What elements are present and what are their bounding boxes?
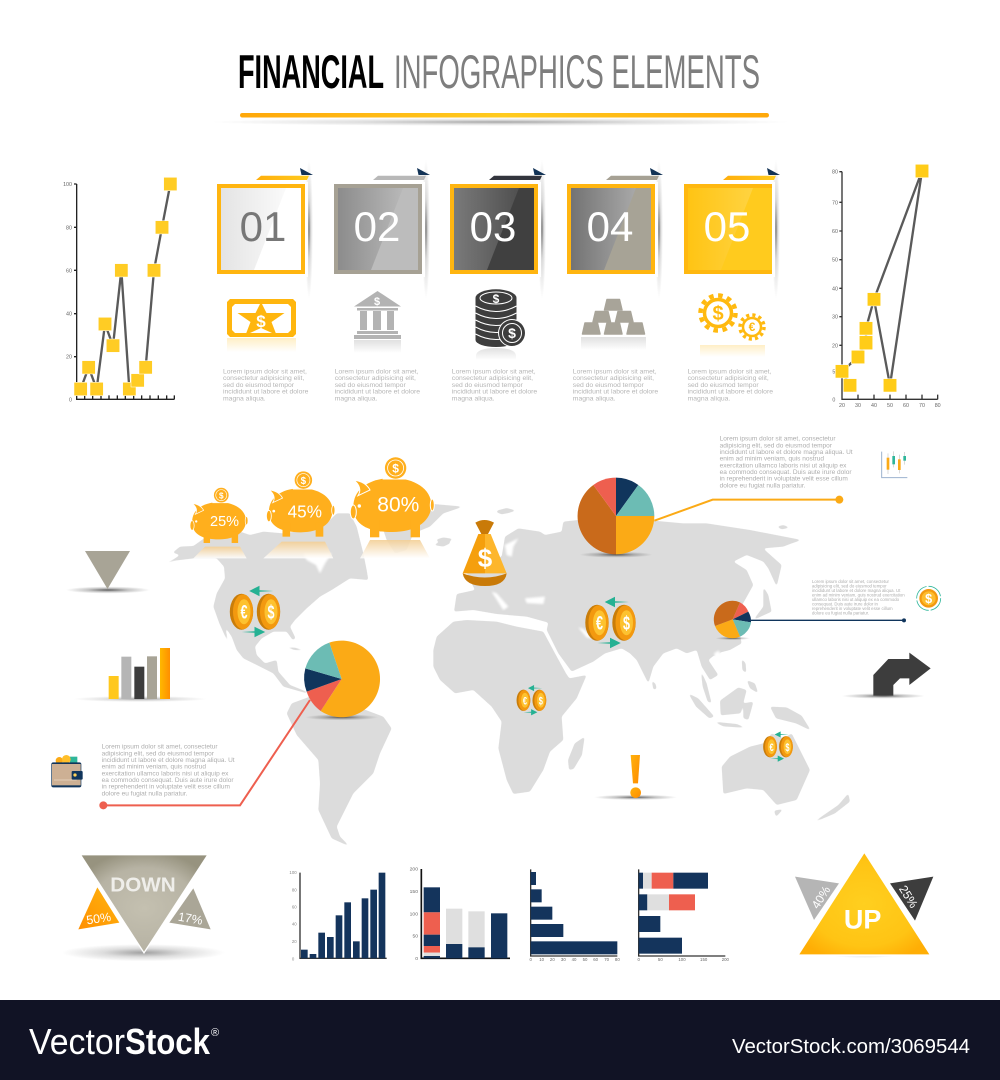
panel: card 05: 05 <box>704 203 750 250</box>
callout: small east asia pie chart <box>714 579 906 640</box>
callout: south america pie chart: Lorem ipsum dolor sit amet, consectetur <box>102 744 218 751</box>
chart: horizontal bars: 70 <box>604 957 610 962</box>
text block: card 03 description: Lorem ipsum dolor sit amet, <box>452 368 536 376</box>
chart: vertical bars: 0 <box>292 956 295 961</box>
text block: card 05 description: consectetur adipisicing elit, <box>688 375 769 382</box>
panel: up triangle <box>795 849 934 958</box>
callout: small east asia pie chart: Lorem ipsum dolor sit amet, consectetur <box>812 579 890 584</box>
chart: right scatter line: 30 <box>832 315 838 321</box>
callout: south america pie chart <box>99 641 380 809</box>
pig reflections <box>193 540 430 558</box>
icon: candlestick chart <box>882 451 907 478</box>
text block: card 03 description: incididunt ut labore et dolore <box>452 389 537 396</box>
icon: piggy bank 25%: 25% <box>210 514 239 530</box>
text block: card 02 description: magna aliqua. <box>335 395 378 402</box>
icon: gears <box>700 296 765 357</box>
icon: gears: € <box>749 320 756 334</box>
text block: card 01 description: sed do eiusmod tempor <box>223 382 295 389</box>
callout: small east asia pie chart: consequat. Duis aute irure dolor in <box>812 601 879 606</box>
footer bar: Stock <box>125 1021 211 1062</box>
chart: horizontal bars: 80 <box>615 957 620 962</box>
chart: right scatter line: 80 <box>832 169 838 175</box>
callout: top right pie chart: adipisicing elit, sed do eiusmod tempor <box>720 442 833 449</box>
icon: piggy bank 25%: $ <box>219 491 224 500</box>
text block: card 01 description: Lorem ipsum dolor sit amet, <box>223 368 307 376</box>
chart: stacked bars: 200 <box>410 867 418 873</box>
callout: south america pie chart: ea commodo consequat. Duis aute irure dolor <box>102 777 234 784</box>
icon: exchange coins australia: € <box>769 742 774 754</box>
icon: exchange coins australia <box>763 731 793 762</box>
chart: right scatter line: 0 <box>832 397 835 403</box>
chart: right scatter line <box>832 164 941 409</box>
panel: down triangle: DOWN <box>110 873 176 896</box>
chart: horizontal bars: 40 <box>572 957 577 962</box>
panel: card 01: 01 <box>240 203 286 250</box>
title rule <box>210 113 790 126</box>
chart: vertical bars <box>289 870 387 961</box>
chart: left scatter line: 80 <box>66 225 72 231</box>
chart: stacked horizontal bars: 100 <box>678 957 686 962</box>
icon: exchange coins australia: $ <box>785 742 790 754</box>
icon: exclamation mark <box>594 755 677 800</box>
text block: card 05 description: magna aliqua. <box>688 395 730 402</box>
chart: stacked horizontal bars: 50 <box>658 957 663 962</box>
text block: card 05 description: Lorem ipsum dolor sit amet, <box>688 368 772 376</box>
icon: money bag: $ <box>478 543 493 573</box>
text block: card 04 description: Lorem ipsum dolor sit amet, <box>573 368 657 376</box>
callout: small east asia pie chart: ullamco laboris nisi ut aliquip ex ea commodo <box>812 597 900 602</box>
chart: right scatter line: 40 <box>871 403 877 409</box>
panel: down triangle <box>62 854 225 961</box>
panel: down triangle: 17% <box>177 910 204 928</box>
icon: exchange coins africa <box>517 685 546 715</box>
icon: bank: $ <box>374 296 380 308</box>
chart: vertical bars: 60 <box>292 905 297 910</box>
icon: coin stack: $ <box>493 292 500 306</box>
chart: right scatter line: 60 <box>903 403 909 409</box>
callout: south america pie chart: adipisicing elit, sed do eiusmod tempor <box>102 750 215 757</box>
icon: exchange coins asia <box>585 597 636 648</box>
chart: right scatter line: 40 <box>832 286 838 292</box>
icon: exchange coins africa: $ <box>539 695 543 707</box>
chart: right scatter line: 20 <box>839 403 845 409</box>
callout: top right pie chart <box>578 436 853 558</box>
panel: up triangle: 40% <box>809 883 833 911</box>
chart: right scatter line: 5 <box>832 369 835 375</box>
text block: card 02 description: Lorem ipsum dolor sit amet, <box>335 368 419 376</box>
chart: right scatter line: 50 <box>887 403 893 409</box>
callout: top right pie chart: enim ad minim veniam, quis nostrud <box>720 456 824 463</box>
panel: card 03 <box>450 159 546 299</box>
icon: wallet <box>51 755 83 787</box>
icon: coin with cycle arrows: $ <box>925 592 932 606</box>
chart: horizontal bars: 50 <box>583 957 588 962</box>
panel: card 02: 02 <box>354 203 400 250</box>
chart: stacked bars: 100 <box>410 911 418 917</box>
icon: piggy bank 80% <box>350 457 434 537</box>
chart: horizontal bars: 0 <box>529 957 532 962</box>
icon: exchange coins africa: € <box>523 695 527 707</box>
callout: south america pie chart: incididunt ut labore et dolore magna aliqua. Ut <box>102 757 235 764</box>
chart: vertical bars: 100 <box>289 870 297 875</box>
footer bar <box>0 1000 1000 1080</box>
callout: south america pie chart: enim ad minim veniam, quis nostrud <box>102 764 206 771</box>
chart: right scatter line: 70 <box>832 200 838 206</box>
footer bar: VectorStock.com/3069544 <box>732 1036 970 1058</box>
text block: card 05 description: incididunt ut labore et dolore <box>688 389 773 396</box>
icon: piggy bank 45%: $ <box>301 476 307 487</box>
chart: stacked bars: 50 <box>412 934 418 940</box>
icon: bar chart with five bars <box>73 648 207 702</box>
chart: right scatter line: 20 <box>832 343 838 349</box>
callout: small east asia pie chart: adipisicing elit, sed do eiusmod tempor <box>812 583 887 588</box>
icon: exchange coins north america: $ <box>268 603 275 624</box>
text block: card 04 description: consectetur adipisicing elit, <box>573 375 654 382</box>
sea cut-outs are drawn in white <box>492 538 721 659</box>
panel: card 03: 03 <box>470 203 516 250</box>
text block: card 03 description: consectetur adipisicing elit, <box>452 375 533 382</box>
chart: right scatter line: 70 <box>919 403 925 409</box>
chart: vertical bars: 40 <box>292 922 297 927</box>
icon: piggy bank 45%: 45% <box>288 502 322 522</box>
text block: card 01 description: magna aliqua. <box>223 395 266 402</box>
chart: stacked bars <box>410 867 510 962</box>
icon: piggy bank 80%: $ <box>392 462 399 476</box>
panel: card 04 <box>567 159 663 299</box>
callout: small east asia pie chart: dolore eu fugiat nulla pariatur. <box>812 610 869 615</box>
chart: vertical bars: 80 <box>292 887 297 892</box>
icon: exchange coins asia: $ <box>623 614 630 635</box>
text block: card 04 description: magna aliqua. <box>573 395 616 402</box>
chart: right scatter line: 50 <box>832 258 838 264</box>
callout: south america pie chart: dolore eu fugiat nulla pariatur. <box>102 790 188 797</box>
panel: card 05 <box>684 159 780 299</box>
chart: left scatter line: 0 <box>69 397 72 403</box>
footer bar: ® <box>211 1027 219 1039</box>
chart: left scatter line: 60 <box>66 268 72 274</box>
panel: up triangle: UP <box>844 904 881 934</box>
chart: right scatter line: 30 <box>855 403 861 409</box>
chart: stacked bars: 0 <box>415 956 418 962</box>
chart: horizontal bars: 10 <box>539 957 545 962</box>
title: FINANCIAL <box>238 45 384 98</box>
callout: top right pie chart: dolore eu fugiat nulla pariatur. <box>720 482 806 489</box>
icon: coin with cycle arrows <box>917 586 941 610</box>
chart: left scatter line: 20 <box>66 355 72 361</box>
chart: left scatter line: 40 <box>66 312 72 318</box>
panel: up triangle: 25% <box>896 883 921 911</box>
callout: top right pie chart: Lorem ipsum dolor sit amet, consectetur <box>720 436 836 443</box>
icon: piggy bank 25% <box>190 488 248 543</box>
chart: horizontal bars: 20 <box>550 957 555 962</box>
text block: card 02 description: consectetur adipisicing elit, <box>335 375 416 382</box>
title: INFOGRAPHICS ELEMENTS <box>394 45 760 98</box>
icon: piggy bank 45% <box>266 471 335 537</box>
callout: top right pie chart: in reprehenderit in voluptate velit esse cillum <box>720 476 848 483</box>
chart: right scatter line: 80 <box>935 403 941 409</box>
chart: stacked horizontal bars: 150 <box>700 957 708 962</box>
callout: small east asia pie chart: enim ad minim veniam, quis nostrud exercitation <box>812 592 905 597</box>
chart: left scatter line: 100 <box>63 182 72 188</box>
panel: card 04: 04 <box>587 203 633 250</box>
title <box>238 45 760 98</box>
icon: banknote with star <box>227 299 296 352</box>
text block: card 01 description: incididunt ut labore et dolore <box>223 389 309 396</box>
panel: card 01 <box>217 159 313 299</box>
chart: vertical bars: 20 <box>292 939 297 944</box>
chart: horizontal bars <box>529 869 620 962</box>
callout: top right pie chart: exercitation ullamco laboris nisi ut aliquip ex <box>720 462 847 469</box>
panel: down triangle: 50% <box>85 910 112 927</box>
chart: horizontal bars: 60 <box>593 957 599 962</box>
icon: coin stack: $ <box>508 325 516 341</box>
text block: card 02 description: incididunt ut labore et dolore <box>335 389 420 396</box>
icon: exchange coins north america: € <box>240 603 248 624</box>
text block: card 03 description: sed do eiusmod tempor <box>452 382 524 389</box>
text block: card 05 description: sed do eiusmod tempor <box>688 382 759 389</box>
callout: small east asia pie chart: incididunt ut labore et dolore magna aliqua. Ut <box>812 588 901 593</box>
text block: card 04 description: incididunt ut labore et dolore <box>573 389 658 396</box>
callout: top right pie chart: ea commodo consequat. Duis aute irure dolor <box>720 469 852 476</box>
text block: card 04 description: sed do eiusmod tempor <box>573 382 645 389</box>
chart: left scatter line <box>63 177 177 403</box>
panel: card 02 <box>334 159 430 299</box>
world map <box>160 504 850 847</box>
chart: stacked horizontal bars: 200 <box>722 957 730 962</box>
icon: exchange coins north america <box>230 586 280 637</box>
icon: piggy bank 80%: 80% <box>377 494 419 516</box>
icon: turn arrow <box>842 653 931 699</box>
text block: card 01 description: consectetur adipisicing elit, <box>223 375 304 382</box>
icon: inverted triangle <box>66 551 150 594</box>
callout: south america pie chart: exercitation ullamco laboris nisi ut aliquip ex <box>102 770 229 777</box>
icon: coin stack <box>476 289 526 360</box>
chart: stacked horizontal bars: 0 <box>637 957 640 962</box>
callout: south america pie chart: in reprehenderit in voluptate velit esse cillum <box>102 784 230 791</box>
chart: horizontal bars: 30 <box>561 957 566 962</box>
callout: small east asia pie chart: reprehenderit in voluptate velit esse cillum <box>812 606 893 611</box>
chart: stacked horizontal bars <box>637 869 730 962</box>
text block: card 03 description: magna aliqua. <box>452 395 495 402</box>
icon: gears: $ <box>712 303 724 325</box>
text block: card 02 description: sed do eiusmod tempor <box>335 382 406 389</box>
icon: banknote with star: $ <box>256 312 266 331</box>
icon: bank <box>354 291 401 353</box>
chart: right scatter line: 60 <box>832 229 838 235</box>
icon: gold bars <box>581 300 646 350</box>
icon: exchange coins asia: € <box>596 614 603 635</box>
footer bar: Vector <box>29 1021 125 1062</box>
chart: stacked bars: 150 <box>410 889 418 895</box>
icon: money bag <box>463 520 507 586</box>
callout: top right pie chart: incididunt ut labore et dolore magna aliqua. Ut <box>720 449 853 456</box>
